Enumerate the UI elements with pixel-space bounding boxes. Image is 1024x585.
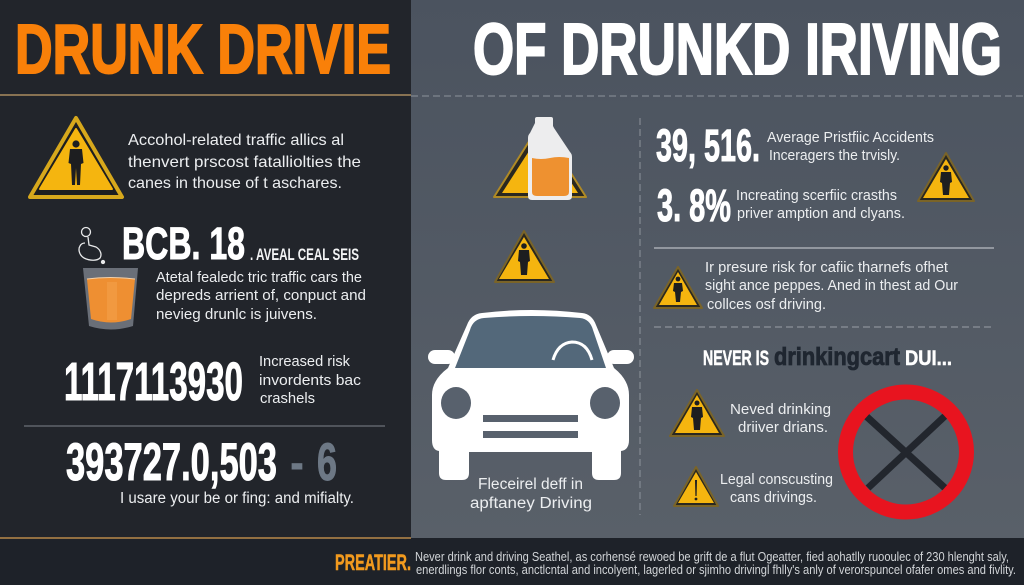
text block: increating: Increating scerfiic crasths bbox=[736, 188, 897, 204]
icon: warning triangle with person, left bbox=[30, 118, 122, 197]
text block: average traffic: Inceragers the trvisly. bbox=[769, 148, 900, 164]
panel: bottom band bbox=[0, 538, 1024, 585]
stat: 39,516: 39, 516. bbox=[656, 120, 760, 171]
text block: pressure risk: sight ance peppes. Aned in thest ad Our bbox=[705, 277, 958, 294]
panel: right grey column bbox=[411, 0, 1024, 538]
text block: legal consulting: cans drivings. bbox=[730, 489, 817, 506]
text block: increating: priver amption and clyans. bbox=[737, 206, 905, 222]
text block: increased risk bbox=[259, 354, 361, 407]
icon: warning triangle right bbox=[918, 153, 974, 201]
heading: never is drinking: drinkingcart bbox=[774, 343, 901, 371]
text block: never drinking: driiver drians. bbox=[738, 419, 828, 436]
text block: traffic cars: depreds arrient of, conpuct and bbox=[156, 287, 366, 304]
icon: glass of beer bbox=[83, 268, 138, 330]
icon: warning triangle exclamation bbox=[674, 467, 718, 506]
text block: usare your: I usare your be or fing: and mifialty. bbox=[120, 490, 354, 507]
text block: average traffic bbox=[767, 130, 934, 164]
text block: increating bbox=[736, 188, 905, 222]
text block: traffic cars bbox=[156, 269, 366, 323]
stat: 393727.0,503 - 6: 6 bbox=[317, 433, 337, 492]
stat: 393727.0,503 - 6: - bbox=[290, 433, 304, 492]
stat: 1117113930: 1117113930 bbox=[64, 352, 243, 412]
icon: hand outline bbox=[79, 228, 104, 264]
text block: alcohol related bbox=[128, 132, 361, 192]
footer label: preatier: PREATIER. bbox=[335, 550, 411, 575]
text block: average traffic: Average Pristfiic Accidents bbox=[767, 130, 934, 146]
icon: warning triangle never bbox=[670, 390, 724, 436]
stat: 3.8%: 3. 8% bbox=[657, 180, 731, 231]
text block: alcohol related: canes in thouse of t aschares. bbox=[128, 175, 342, 192]
text block: pressure risk bbox=[705, 259, 958, 313]
text block: legal consulting bbox=[720, 471, 833, 506]
text block: never drinking: Neved drinking bbox=[730, 401, 831, 418]
text block: alcohol related: thenvert prscost fatalliolties the bbox=[128, 154, 361, 171]
stat: 393727.0,503 - 6: 393727.0,503 bbox=[66, 433, 277, 492]
icon: car front bbox=[428, 310, 634, 480]
text block: never drinking bbox=[730, 401, 831, 436]
icon: warning triangle with person bbox=[495, 231, 554, 282]
text block: traffic cars: Atetal fealedc tric traffic cars the bbox=[156, 269, 362, 286]
icon: red prohibition sign with cross bbox=[846, 392, 966, 512]
heading: never is drinking bbox=[703, 343, 952, 371]
icon: warning triangle small bbox=[654, 267, 702, 308]
text block: traffic cars: nevieg drunlc is juivens. bbox=[156, 306, 317, 323]
text block: pressure risk: collces osf driving. bbox=[707, 296, 826, 313]
car caption bbox=[470, 476, 592, 512]
stat: BCB 18: BCB. 18 bbox=[122, 218, 245, 269]
heading: left title: DRUNK DRIVIE bbox=[15, 10, 391, 88]
car caption: Fleceirel deff in bbox=[478, 476, 583, 493]
stat label: aveal ceal seis: . AVEAL CEAL SEIS bbox=[250, 245, 359, 264]
text block: legal consulting: Legal conscusting bbox=[720, 471, 833, 488]
panel: left dark column bbox=[0, 0, 411, 538]
text block: increased risk: Increased risk bbox=[259, 354, 351, 370]
text block: increased risk: crashels bbox=[260, 391, 315, 407]
car caption: apftaney Driving bbox=[470, 495, 592, 512]
text block: pressure risk: Ir presure risk for cafiic tharnefs ofhet bbox=[705, 259, 949, 276]
icon: warning triangle with bottle bbox=[494, 117, 586, 200]
footer text bbox=[415, 550, 1016, 577]
heading: never is drinking: DUI... bbox=[905, 347, 952, 370]
heading: never is drinking: NEVER IS bbox=[703, 347, 769, 370]
text block: alcohol related: Accohol-related traffic allics al bbox=[128, 132, 344, 149]
text block: increased risk: invordents bac bbox=[259, 373, 361, 389]
